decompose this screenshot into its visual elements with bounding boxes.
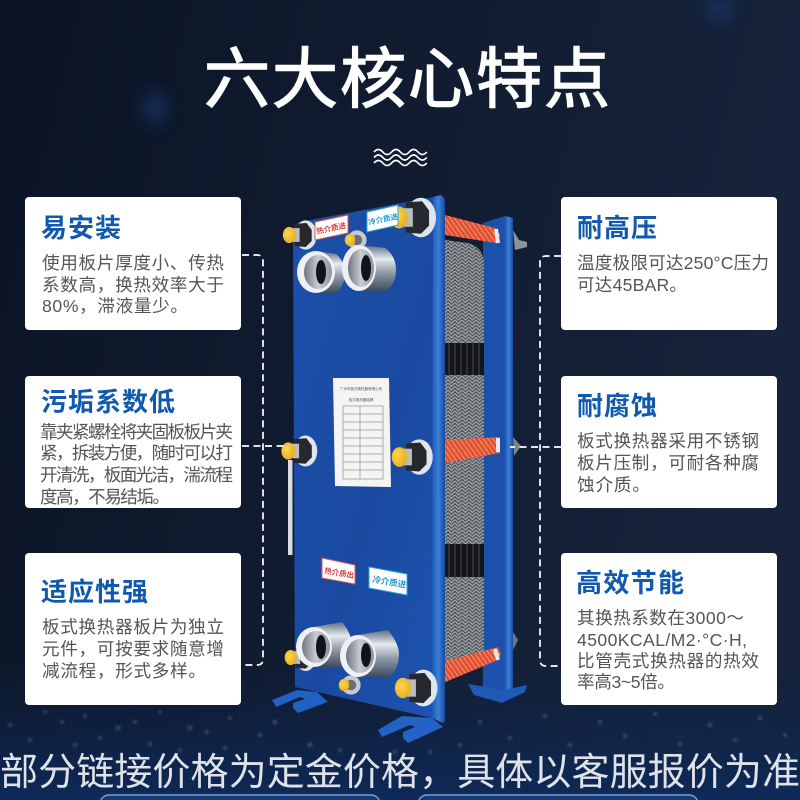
card: easy installation xyxy=(25,197,241,330)
card: high efficiency: 其换热系数在3000～ xyxy=(577,608,744,628)
card: low fouling: 靠夹紧螺栓将夹固板板片夹 xyxy=(40,422,233,442)
card: high pressure resistance: 温度极限可达250°C压力 xyxy=(577,253,769,273)
card: corrosion resistance: 蚀介质。 xyxy=(577,475,650,495)
card: strong adaptability: 减流程，形式多样。 xyxy=(42,661,206,681)
card: strong adaptability: 板式换热器板片为独立 xyxy=(42,617,224,637)
white strip xyxy=(288,460,292,555)
notice text: 部分链接价格为定金价格，具体以客服报价为准 xyxy=(0,752,800,794)
bolts xyxy=(281,198,438,706)
front plate feet xyxy=(272,690,443,743)
card: high efficiency: 4500KCAL/M2·°C·H, xyxy=(577,630,747,650)
icon: waves xyxy=(374,150,427,166)
product: plate heat exchanger xyxy=(272,195,527,743)
card: low fouling: 紧，拆装方便，随时可以打 xyxy=(40,443,233,463)
back plate with foot xyxy=(468,216,527,703)
card: strong adaptability: 适应性强 xyxy=(41,577,148,607)
card: high pressure resistance: 可达45BAR。 xyxy=(577,275,687,295)
card: easy installation: 易安装 xyxy=(41,213,121,243)
card: low fouling: 度高，不易结垢。 xyxy=(40,487,170,507)
card: easy installation: 80%，滞液量少。 xyxy=(42,296,188,316)
label: hot medium outlet xyxy=(322,558,355,584)
label: cold medium inlet xyxy=(367,205,399,232)
card: easy installation: 使用板片厚度小、传热 xyxy=(42,253,224,273)
front plate side xyxy=(432,195,445,723)
label: hot medium inlet xyxy=(315,215,348,240)
label: hot medium inlet: 热介质进 xyxy=(315,220,347,236)
front plate xyxy=(293,197,445,722)
label: cold medium inlet: 冷介质进 xyxy=(367,211,399,227)
card: strong adaptability xyxy=(25,553,241,705)
label: hot medium outlet: 热介质出 xyxy=(324,565,355,580)
card: high efficiency: 率高3~5倍。 xyxy=(577,672,675,692)
card: high efficiency: 比管壳式换热器的热效 xyxy=(577,651,759,671)
dashed connector: right xyxy=(510,256,561,666)
card: high pressure resistance: 耐高压 xyxy=(577,213,657,243)
nameplate xyxy=(333,378,391,487)
card: strong adaptability: 元件，可按要求随意增 xyxy=(42,639,224,659)
dashed connector: left xyxy=(242,255,286,665)
top pipes xyxy=(297,245,396,294)
nameplate: 板式换热器铭牌 xyxy=(349,397,374,402)
title: 六大核心特点 xyxy=(204,42,612,116)
card: corrosion resistance: 板片压制，可耐各种腐 xyxy=(577,453,759,473)
bottom buttons xyxy=(100,795,698,800)
nameplate: 广州市板式换热器有限公司 xyxy=(340,386,382,391)
card: low fouling: 开清洗，板面光洁，湍流程 xyxy=(40,465,233,485)
card: easy installation: 系数高，换热效率大于 xyxy=(42,275,224,295)
card: high pressure resistance xyxy=(561,197,777,330)
plate pack xyxy=(445,240,484,668)
red tubes xyxy=(443,215,501,683)
card: high efficiency xyxy=(561,553,777,705)
card: corrosion resistance: 耐腐蚀 xyxy=(577,391,657,421)
label: cold medium inlet lower: 冷介质进 xyxy=(372,574,407,590)
card: low fouling xyxy=(25,376,241,508)
card: low fouling: 污垢系数低 xyxy=(41,387,175,417)
card: corrosion resistance: 板式换热器采用不锈钢 xyxy=(577,431,759,451)
bottom pipes xyxy=(296,622,399,678)
card: high efficiency: 高效节能 xyxy=(576,568,684,598)
card: corrosion resistance xyxy=(561,376,777,508)
label: cold medium inlet lower xyxy=(369,567,407,595)
